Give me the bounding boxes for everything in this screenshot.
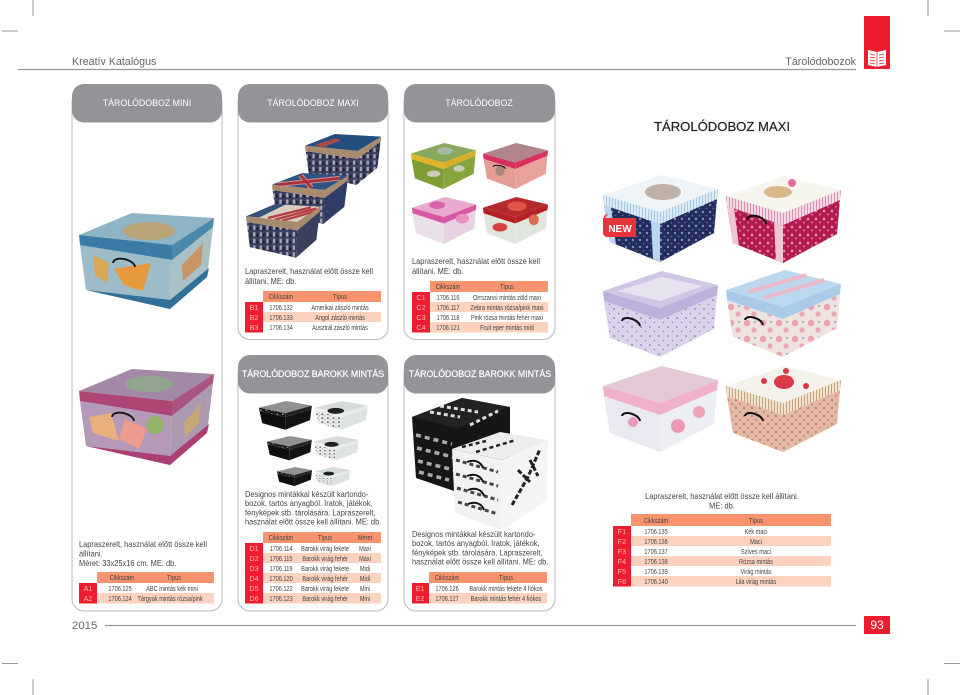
table: D: 1706.114 <box>270 545 293 553</box>
panel: tárolódoboz mini <box>72 84 222 611</box>
table: C: 1706.118 <box>437 314 460 322</box>
table: D: Barokk virág fehér <box>302 575 349 583</box>
table: A: 1706.125 <box>108 585 132 593</box>
table: D: 1706.115 <box>270 555 293 563</box>
table: D: Midi <box>360 565 370 573</box>
page header: Tárolódobozok <box>785 56 857 68</box>
table: D: D3 <box>249 564 259 573</box>
table: B: B1 <box>250 303 258 312</box>
table: D: D5 <box>249 584 259 593</box>
table: F <box>613 514 831 586</box>
table: F: 1706.138 <box>644 558 668 566</box>
text: barokk D description: fényképek stb. tárolására. Lapraszerelt, <box>245 508 376 518</box>
table: E: E1 <box>416 584 424 593</box>
table: D: D1 <box>249 544 259 553</box>
box: E2 white four-drawer <box>452 432 548 530</box>
table: D: Maxi <box>359 545 371 553</box>
heading: tárolódoboz: TÁROLÓDOBOZ <box>445 98 513 108</box>
heading: barokk D <box>238 355 388 394</box>
table: C <box>412 281 548 332</box>
table: C: 1706.116 <box>437 294 460 302</box>
table: A: A2 <box>84 594 92 603</box>
box: A2 pink items <box>79 369 214 465</box>
text: F description: ME: db. <box>709 501 735 511</box>
icon: red tab with book <box>864 16 890 69</box>
table: B: 1706.134 <box>269 324 293 332</box>
box: C3 pink rose <box>412 197 476 244</box>
table: B: Típus <box>333 293 347 301</box>
text: barokk E description: használat előtt össze kell állítani. ME: db. <box>412 557 548 567</box>
box: F4 blue floral <box>726 270 841 357</box>
box: D3 black midi <box>267 436 312 460</box>
table: C: Cikkszám <box>436 283 460 291</box>
box: F3 lilac <box>603 271 718 357</box>
table: C: Orrszarvú mintás zöld maxi <box>473 294 541 302</box>
table: B: Ausztrál zászló mintás <box>312 324 368 332</box>
box: C4 strawberry <box>483 197 548 244</box>
table: D: Barokk virág fekete <box>301 585 349 593</box>
table: D: 1706.122 <box>269 585 293 593</box>
table: F: F4 <box>618 557 626 566</box>
text: mini description: állítani. <box>79 549 103 559</box>
box: C2 pink zebra <box>483 143 548 189</box>
table: F: Szíves maci <box>741 548 771 556</box>
table: D: Barokk virág fekete <box>301 545 349 553</box>
box: E1 black four-drawer <box>412 398 510 493</box>
heading: barokk E: TÁROLÓDOBOZ BAROKK MINTÁS <box>409 369 551 379</box>
table: A <box>79 572 214 604</box>
text: barokk E description: Designos mintákkal készült kartondo- <box>412 530 535 539</box>
table: B: Angol zászló mintás <box>315 314 365 322</box>
text: barokk D description: használat előtt össze kell állítani. ME: db. <box>245 517 381 527</box>
badge: new <box>603 214 636 237</box>
table: F: 1706.136 <box>644 538 668 546</box>
table: C: Zebra mintás rózsa/pink maxi <box>470 304 544 312</box>
table: E: Cikkszám <box>435 574 459 582</box>
table: B <box>245 291 381 332</box>
table: B: 1706.133 <box>269 314 293 322</box>
title: tárolódoboz maxi: TÁROLÓDOBOZ MAXI <box>654 119 790 134</box>
text: maxi description: állítani. ME: db. <box>245 277 296 286</box>
heading: barokk D: TÁROLÓDOBOZ BAROKK MINTÁS <box>242 369 384 379</box>
table: F: Maci <box>750 538 762 546</box>
table: B: B3 <box>250 323 258 332</box>
table: F: F2 <box>618 537 626 546</box>
table: F: Típus <box>749 517 763 525</box>
heading: tárolódoboz <box>404 84 555 122</box>
box: D2 white maxi <box>315 401 368 430</box>
table: D: Barokk virág fekete <box>301 565 349 573</box>
text: barokk E description: fényképek stb. tárolására. Lapraszerelt, <box>412 548 543 558</box>
box: B1 US flag <box>246 204 320 258</box>
table: F: 1706.140 <box>644 578 668 586</box>
table: F: F3 <box>618 547 626 556</box>
panel: barokk mintás D <box>238 355 388 611</box>
table: D: Méret <box>358 534 372 542</box>
box: D6 white mini <box>315 467 350 486</box>
text: F description: Lapraszerelt, használat előtt össze kell állítani. <box>645 492 799 501</box>
table: D: Mini <box>360 595 370 603</box>
table: F: F5 <box>618 567 626 576</box>
table: A: Típus <box>167 574 181 582</box>
box: F2 monkey <box>726 176 841 263</box>
table: C: Pink rózsa mintás fehér maxi <box>471 314 543 322</box>
table: C: C1 <box>416 293 426 302</box>
text: barokk D description: Designos mintákkal készült kartondo- <box>245 490 368 499</box>
table: D: Barokk virág fehér <box>302 555 349 563</box>
page number: 93 <box>870 618 884 632</box>
box: F6 heart <box>726 366 841 452</box>
table: D: D4 <box>249 574 259 583</box>
text: mini description: Méret: 33x25x16 cm. ME: db. <box>79 559 176 568</box>
table: C: C3 <box>416 313 426 322</box>
table: A: A1 <box>84 584 92 593</box>
box: C1 green <box>411 143 476 189</box>
table: F: F6 <box>618 577 626 586</box>
table: D: Midi <box>360 575 370 583</box>
page header <box>18 56 857 70</box>
table: D: Barokk virág fehér <box>302 595 349 603</box>
panel: tárolódoboz maxi flags <box>238 84 388 340</box>
heading: barokk E <box>404 355 555 394</box>
heading: maxi: TÁROLÓDOBOZ MAXI <box>267 98 359 108</box>
page header: Kreatív Katalógus <box>72 56 156 68</box>
table: F: Cikkszám <box>644 517 668 525</box>
box: D1 black maxi <box>259 401 312 430</box>
page footer: 2015 <box>72 620 97 632</box>
box: D5 black mini <box>277 467 312 486</box>
box: F1 bear <box>603 175 718 262</box>
text: tárolódoboz description: Lapraszerelt, használat előtt össze kell <box>412 257 540 266</box>
table: F: Rózsa mintás <box>739 558 773 566</box>
box: D4 white midi <box>314 436 359 460</box>
table: B: Cikkszám <box>269 293 293 301</box>
table: B: B2 <box>250 313 258 322</box>
table: C: 1706.121 <box>436 324 460 332</box>
table: F: Virág mintás <box>740 568 772 576</box>
table: A: Tárgyak mintás rózsa/pink <box>137 595 203 603</box>
table: F: Kék maci <box>744 528 768 536</box>
panel: barokk mintás E <box>404 355 555 611</box>
text: barokk D description: bozok, tartós anyagból. Iratok, játékok, <box>245 499 373 508</box>
table: D: Mini <box>360 585 370 593</box>
table: D: Cikkszám <box>269 534 293 542</box>
table: C: Típus <box>500 283 514 291</box>
table: C: C4 <box>416 323 426 332</box>
table: D: D6 <box>249 594 259 603</box>
box: F5 pink rose <box>603 366 718 452</box>
table: D: Típus <box>318 534 332 542</box>
table: D: Maxi <box>359 555 371 563</box>
table: E: Barokk mintás fekete 4 fiókos <box>469 585 543 593</box>
table: C: C2 <box>416 303 426 312</box>
table: D <box>245 532 381 604</box>
table: E <box>412 572 547 604</box>
badge: new: NEW <box>608 224 632 235</box>
heading: mini: TÁROLÓDOBOZ MINI <box>103 98 191 108</box>
table: F: F1 <box>618 527 626 536</box>
table: D: 1706.119 <box>270 565 293 573</box>
text: maxi description: Lapraszerelt, használat előtt össze kell <box>245 267 373 276</box>
heading: maxi <box>238 84 388 122</box>
table: D: 1706.120 <box>269 575 293 583</box>
table: E: 1706.126 <box>435 585 459 593</box>
table: B: Amerikai zászló mintás <box>311 304 369 312</box>
table: E: Barokk mintás fehér 4 fiókos <box>471 595 541 603</box>
table: E: 1706.127 <box>435 595 459 603</box>
table: F: 1706.139 <box>644 568 668 576</box>
text: tárolódoboz description: állítani. ME: db. <box>412 267 463 276</box>
table: E: Típus <box>499 574 513 582</box>
box: B3 Australian flag <box>305 134 381 185</box>
table: B: 1706.132 <box>269 304 293 312</box>
page number <box>864 616 890 634</box>
table: C: Fruit eper mintás midi <box>480 324 534 332</box>
text: mini description: Lapraszerelt, használat előtt össze kell <box>79 540 207 549</box>
table: A: ABC mintás kék mini <box>146 585 198 593</box>
table: D: 1706.123 <box>269 595 293 603</box>
table: A: Cikkszám <box>110 574 134 582</box>
table: E: E2 <box>416 594 424 603</box>
heading: mini <box>72 84 222 122</box>
table: F: 1706.135 <box>644 528 668 536</box>
table: C: 1706.117 <box>437 304 460 312</box>
table: D: D2 <box>249 554 259 563</box>
text: barokk E description: bozok, tartós anyagból. Iratok, játékok, <box>412 539 540 548</box>
table: A: 1706.124 <box>108 595 132 603</box>
panel: tárolódoboz <box>404 84 555 340</box>
table: F: 1706.137 <box>644 548 668 556</box>
box: B2 UK flag <box>272 173 348 224</box>
box: A1 ABC blue <box>79 213 214 309</box>
table: F: Lila virág mintás <box>736 578 776 586</box>
